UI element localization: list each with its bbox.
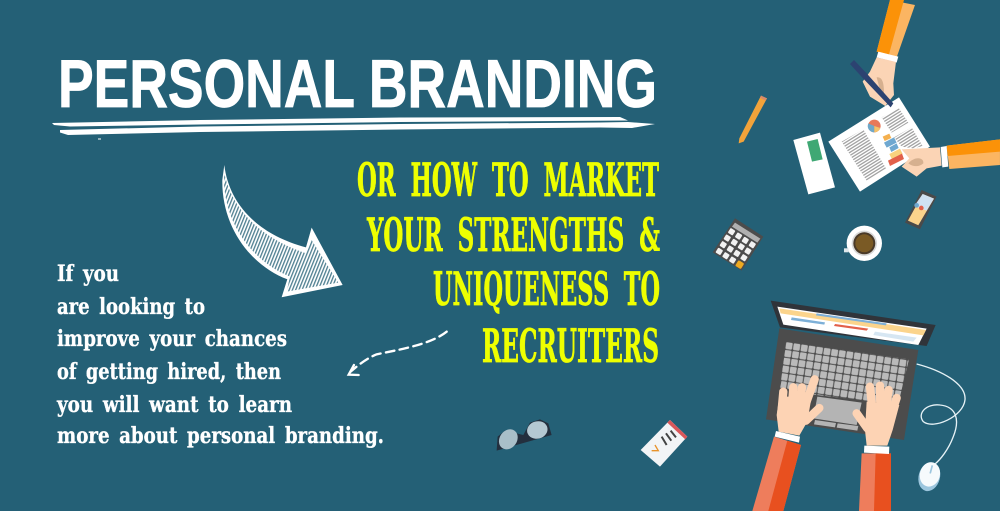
title underline brush stroke (52, 117, 655, 140)
icon: glasses (495, 419, 552, 453)
laptop base (766, 328, 918, 440)
laptop screen (771, 301, 936, 346)
subtitle: RECRUITERS (482, 319, 659, 373)
right hand (857, 386, 899, 446)
intro paragraph: more about personal branding. (57, 423, 384, 449)
right sleeve (859, 453, 891, 511)
icon: dashed arrow (349, 332, 447, 375)
intro paragraph: improve your chances (57, 326, 287, 352)
title: PERSONAL BRANDING (58, 46, 657, 122)
left sleeve (752, 437, 801, 511)
icon: notepad (641, 420, 687, 467)
icon: right hand with sleeve (902, 139, 1000, 177)
left hand (777, 379, 819, 436)
intro paragraph: If you (57, 261, 119, 287)
icon: report sheet (828, 97, 930, 192)
mouse cable (917, 364, 965, 464)
intro paragraph: you will want to learn (56, 392, 292, 418)
keyboard (781, 342, 909, 397)
trackpad (813, 397, 862, 425)
mouse (915, 460, 943, 494)
intro paragraph: of getting hired, then (57, 359, 281, 385)
icon: sketched curved arrow (220, 163, 347, 300)
subtitle (357, 153, 660, 373)
subtitle: YOUR STRENGTHS & (366, 208, 660, 262)
illustration: laptop with typing hands (752, 301, 965, 511)
icon: pencil (739, 96, 767, 143)
icon: coffee cup (844, 226, 882, 261)
text: OR HOW TO MARKET (357, 153, 659, 207)
icon: document with green card (793, 133, 835, 194)
intro paragraph: are looking to (57, 294, 205, 320)
icon: calculator (713, 218, 763, 271)
text: UNIQUENESS TO (433, 262, 660, 316)
icon: top hand with pen (850, 0, 915, 107)
icon: smartphone (905, 190, 937, 229)
intro paragraph (56, 261, 384, 449)
